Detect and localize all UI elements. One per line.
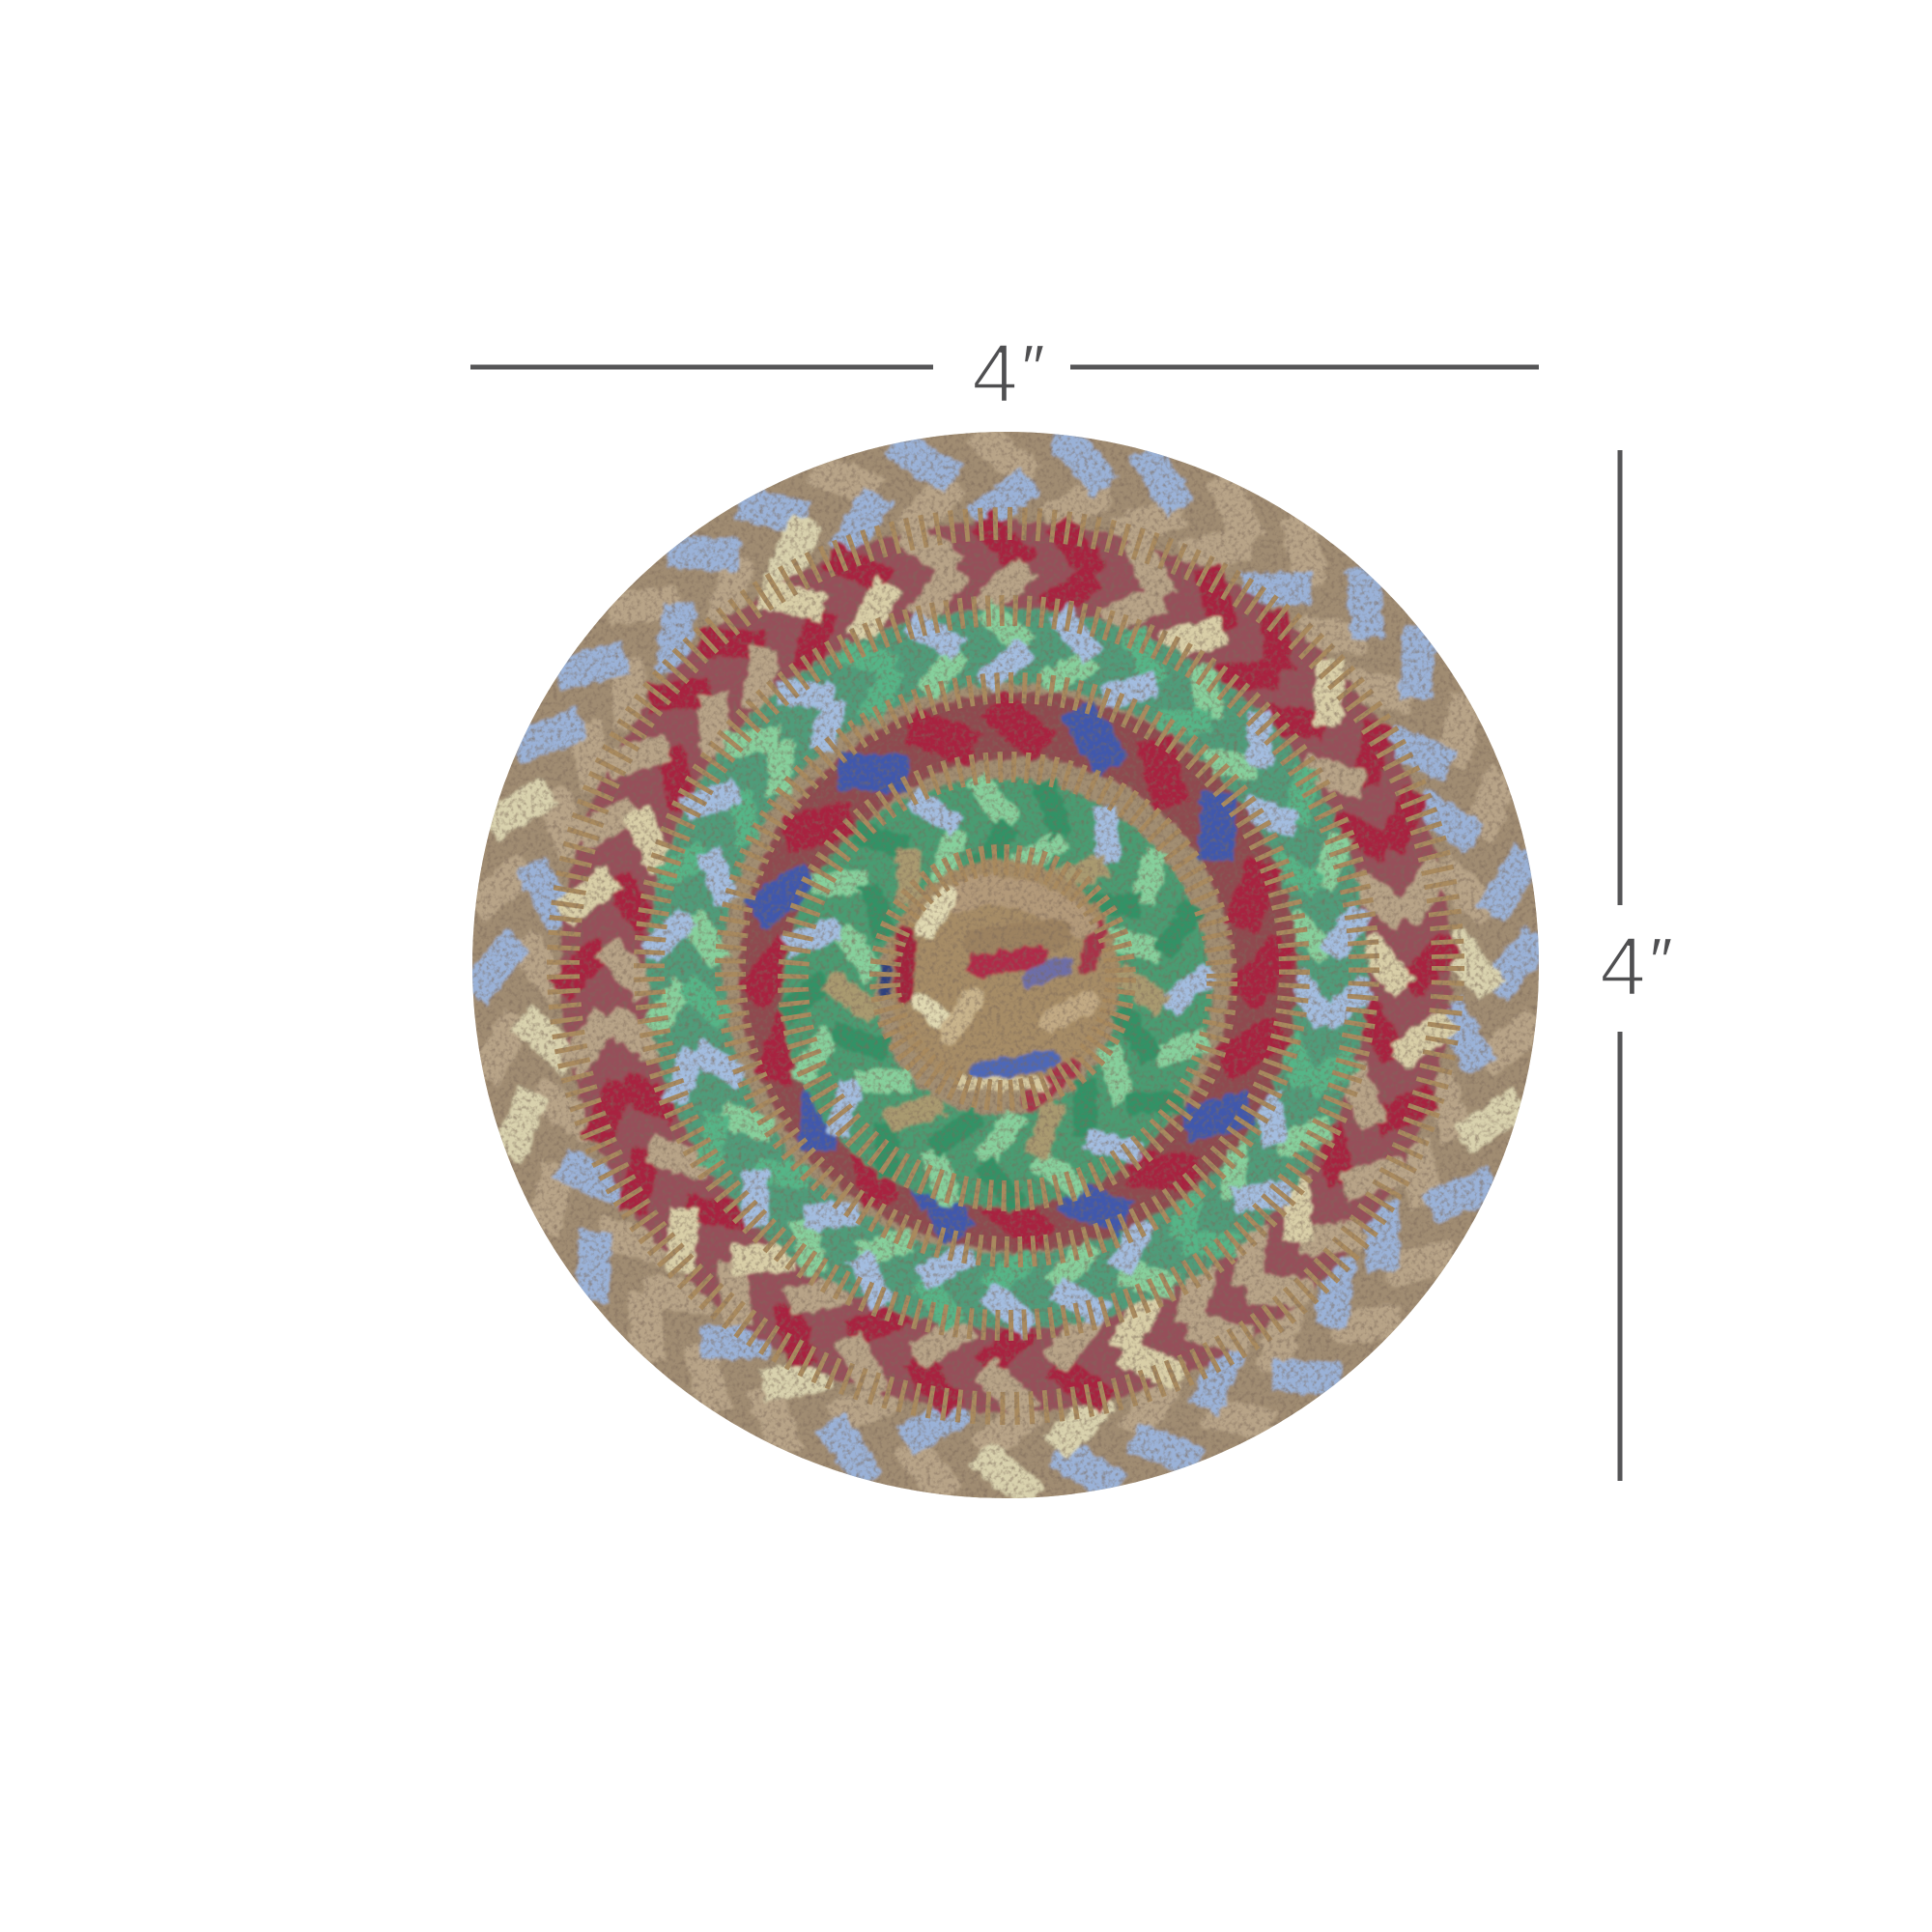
dimension label: width 4 inches: 4 <box>972 327 1018 420</box>
dimension label: height 4 inches: 4 <box>1600 921 1646 1013</box>
fibre texture <box>469 430 1551 1512</box>
band: tan stitched hub <box>887 860 1119 1092</box>
band: red and tan braid <box>559 521 1452 1413</box>
dimension label: height 4 inches: ″ <box>1647 924 1672 996</box>
band: green and light blue braid <box>648 610 1367 1328</box>
band: outer blue and tan braid <box>472 432 1539 1498</box>
centre knot: red, cream and blue strands <box>886 891 1098 1101</box>
dimension label: width 4 inches: ″ <box>1019 331 1044 403</box>
stitching rings <box>563 524 1448 1408</box>
dimension line: height, upper segment <box>1617 450 1623 905</box>
band: red and dark blue rope <box>750 703 1287 1240</box>
band: inner green braid <box>782 779 1211 1208</box>
dimension line: height, lower segment <box>1617 1032 1623 1481</box>
round braided jute coaster <box>469 430 1551 1512</box>
dimension line: width, right segment <box>1070 365 1539 369</box>
dimension line: width, left segment <box>470 365 933 369</box>
